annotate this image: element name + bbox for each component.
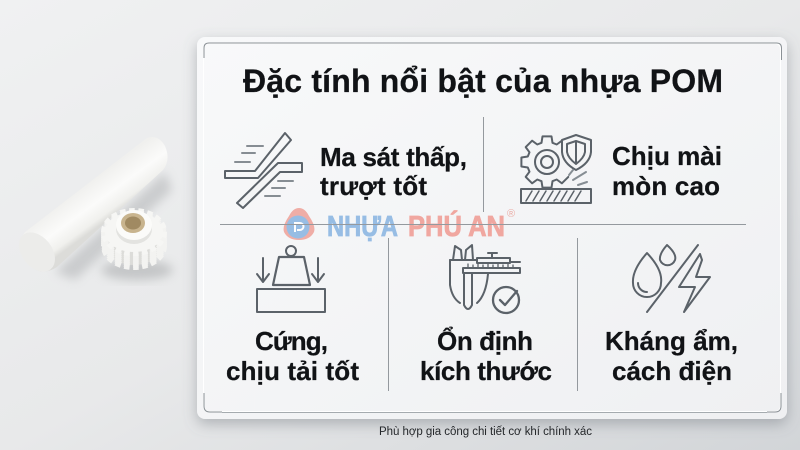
text: hard, load bearing: chịu tải tốt <box>226 356 359 386</box>
text: hard, load bearing: Cứng, <box>255 326 328 356</box>
white gear with brass bushing <box>104 210 164 267</box>
text: low friction <box>320 142 467 201</box>
text: wear resistance: mòn cao <box>612 171 720 201</box>
text: low friction: Ma sát thấp, <box>320 142 467 172</box>
panel <box>197 37 787 419</box>
text: moisture resistance, insulation: Kháng ẩm, <box>605 326 738 356</box>
icon: weight on block <box>257 246 325 312</box>
logo text red: PHÚ AN <box>408 209 505 243</box>
logo text blue: NHỰA <box>327 211 398 243</box>
caption: Phù hợp gia công chi tiết cơ khí chính xác <box>379 426 592 438</box>
text: wear resistance: Chịu mài <box>612 141 722 171</box>
text: low friction: trượt tốt <box>320 171 427 201</box>
grid lines <box>220 117 746 391</box>
icon: low friction sliding plates <box>225 133 302 208</box>
text: wear resistance <box>612 141 722 201</box>
photo: POM rod and gear <box>12 137 173 280</box>
logo mark <box>284 208 314 240</box>
text: dimensional stability: Ổn định <box>437 326 533 356</box>
registered mark: ® <box>507 208 515 220</box>
icon: water drops and lightning <box>633 245 710 312</box>
text: moisture resistance, insulation: cách điện <box>612 356 732 386</box>
text: dimensional stability: kích thước <box>420 356 552 386</box>
icon: caliper with check <box>450 245 520 313</box>
text: moisture resistance, insulation <box>605 326 738 386</box>
watermark: Nhựa Phú An <box>284 208 515 243</box>
icon: gear, shield and worn surface <box>521 135 591 203</box>
text: dimensional stability <box>420 326 552 386</box>
text: hard, load bearing <box>226 326 359 386</box>
title: Đặc tính nổi bật của nhựa POM <box>243 63 723 99</box>
white rod <box>12 137 168 279</box>
rod shadow <box>55 172 172 280</box>
gear shadow <box>101 260 173 280</box>
